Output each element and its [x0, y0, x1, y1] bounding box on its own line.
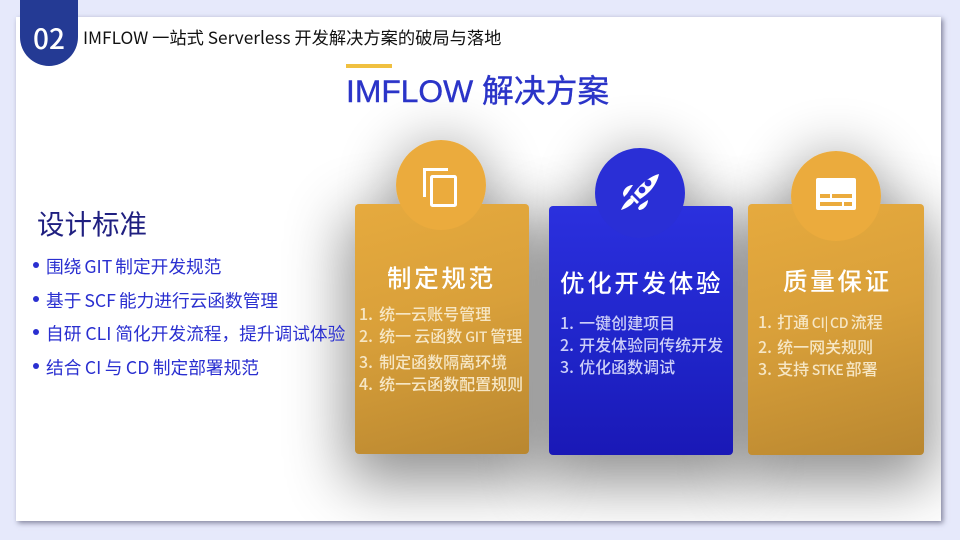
item 2: 2. 统一网关规则 — [758, 334, 873, 358]
panel: quality card — [748, 204, 924, 455]
badge: section number — [20, 0, 78, 66]
item 2: 2. 统一 云函数 GIT 管理 — [359, 323, 522, 347]
item 3: 3. 支持 STKE 部署 — [758, 356, 878, 380]
bullet 2: 基于 SCF 能力进行云函数管理 — [46, 287, 278, 313]
icon: rocket — [595, 148, 685, 238]
icon: subtitles card — [791, 151, 881, 241]
item 1: 1. 统一云账号管理 — [359, 301, 491, 325]
bullet list: design standards — [33, 253, 345, 380]
title: IMFLOW 解决方案 — [346, 73, 609, 109]
card list — [560, 310, 723, 378]
bullet 1: 围绕 GIT 制定开发规范 — [46, 253, 221, 279]
item 3: 3. 优化函数调试 — [560, 354, 675, 378]
item 2: 2. 开发体验同传统开发 — [560, 332, 723, 356]
heading: design standards: 设计标准 — [37, 202, 147, 242]
item 1: 1. 打通 CI| CD 流程 — [758, 309, 883, 333]
title accent bar — [346, 64, 392, 68]
card list — [758, 309, 883, 380]
item 3: 3. 制定函数隔离环境 — [359, 349, 507, 373]
card heading: 优化开发体验 — [560, 265, 723, 300]
item 4: 4. 统一云函数配置规则 — [359, 371, 523, 395]
card heading: 质量保证 — [783, 263, 892, 298]
icon: copy documents — [396, 140, 486, 230]
badge: section number: 02 — [33, 18, 65, 58]
card list — [359, 301, 523, 395]
panel: standards card — [355, 204, 529, 454]
bullet 4: 结合 CI 与 CD 制定部署规范 — [46, 354, 259, 380]
item 1: 1. 一键创建项目 — [560, 310, 675, 334]
bullet 3: 自研 CLI 简化开发流程，提升调试体验 — [46, 320, 345, 346]
header text: IMFLOW 一站式 Serverless 开发解决方案的破局与落地 — [83, 24, 501, 49]
panel: dev experience card — [549, 206, 733, 455]
card heading: 制定规范 — [387, 260, 496, 295]
